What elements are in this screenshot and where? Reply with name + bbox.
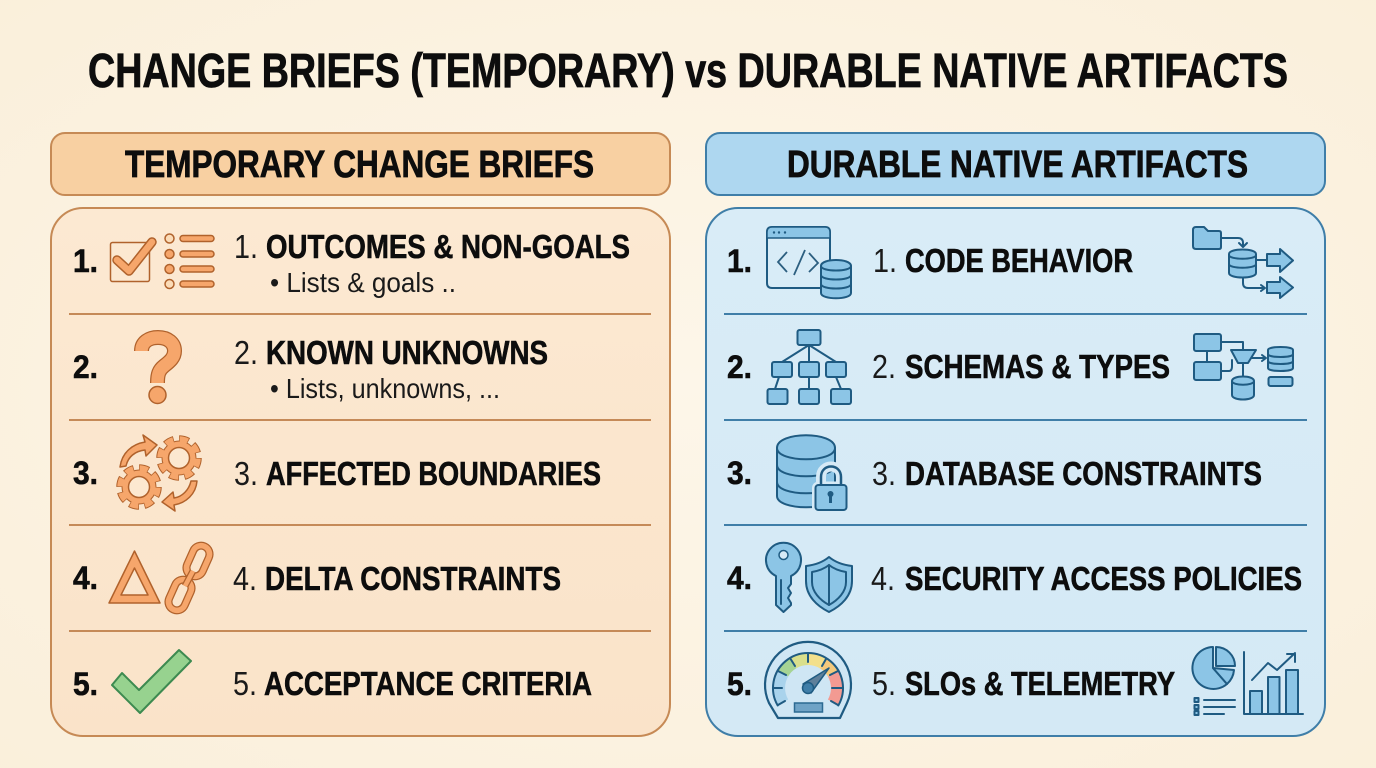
row 1: code behavior: 1. [873, 242, 897, 279]
row 5: acceptance criteria [73, 650, 592, 713]
icon: hierarchy tree [768, 330, 851, 404]
icon: green check mark [112, 650, 191, 713]
row 1: code behavior [727, 227, 1293, 298]
row 2: schemas and types: SCHEMAS & TYPES [905, 348, 1170, 385]
icon: delta triangle and chain [109, 543, 212, 613]
row 3: affected boundaries: 3. [73, 455, 98, 491]
row 1: outcomes and non-goals: OUTCOMES & NON-GOALS [266, 228, 630, 265]
row 2: known unknowns [73, 334, 548, 404]
icon: database with lock [777, 435, 846, 510]
row 2: schemas and types: 2. [872, 348, 896, 385]
row 2: known unknowns: • Lists, unknowns, ... [270, 373, 500, 404]
icon: question mark [142, 338, 174, 404]
panel: temporary change briefs [51, 208, 670, 736]
icon: key and shield [766, 543, 852, 612]
row 5: SLOs and telemetry: 5. [727, 666, 752, 702]
row 4: security access policies: 4. [871, 560, 895, 597]
panel: durable native artifacts [706, 208, 1325, 736]
icon: speedometer gauge [765, 642, 851, 718]
row 2: known unknowns: KNOWN UNKNOWNS [266, 334, 548, 371]
row 4: security access policies [727, 543, 1302, 612]
icon: folder to database flow [1193, 227, 1293, 298]
row 3: database constraints [727, 435, 1262, 510]
row 1: outcomes and non-goals: • Lists & goals .. [270, 267, 456, 298]
row 1: outcomes and non-goals: 1. [234, 228, 258, 265]
header: temporary change briefs [51, 133, 670, 195]
row 1: code behavior: 1. [727, 243, 752, 279]
row 4: security access policies: 4. [727, 560, 752, 596]
icon: pie and bar charts [1192, 647, 1303, 715]
row 5: SLOs and telemetry: 5. [872, 665, 896, 702]
icon: code window and database [767, 227, 851, 298]
row 2: known unknowns: 2. [234, 334, 258, 371]
row 1: outcomes and non-goals [73, 228, 630, 298]
row 3: database constraints: 3. [727, 455, 752, 491]
row 5: acceptance criteria: 5. [233, 665, 257, 702]
row 5: acceptance criteria: ACCEPTANCE CRITERIA [264, 665, 592, 702]
icon: schema flow [1194, 334, 1293, 400]
header: durable native artifacts: DURABLE NATIVE ARTIFACTS [787, 144, 1248, 186]
row 3: database constraints: DATABASE CONSTRAINTS [905, 455, 1262, 492]
row 5: SLOs and telemetry [727, 642, 1303, 718]
row 2: schemas and types: 2. [727, 349, 752, 385]
row 4: security access policies: SECURITY ACCESS POLICIES [905, 560, 1302, 597]
header: temporary change briefs: TEMPORARY CHANGE BRIEFS [125, 144, 594, 186]
row 4: delta constraints [73, 543, 561, 613]
row 4: delta constraints: 4. [73, 560, 98, 596]
row 5: acceptance criteria: 5. [73, 666, 98, 702]
row 2: known unknowns: 2. [73, 349, 98, 385]
header: durable native artifacts [706, 133, 1325, 195]
row 4: delta constraints: 4. [233, 560, 257, 597]
row 4: delta constraints: DELTA CONSTRAINTS [265, 560, 561, 597]
row 3: affected boundaries: 3. [234, 455, 258, 492]
row 3: database constraints: 3. [872, 455, 896, 492]
icon: gears with arrows [120, 435, 198, 511]
row 3: affected boundaries: AFFECTED BOUNDARIES [266, 455, 601, 492]
icon: checklist [110, 234, 214, 288]
row 5: SLOs and telemetry: SLOs & TELEMETRY [905, 665, 1175, 702]
row 2: schemas and types [727, 330, 1293, 404]
row 1: outcomes and non-goals: 1. [73, 243, 98, 279]
row 1: code behavior: CODE BEHAVIOR [905, 242, 1133, 279]
row 3: affected boundaries [73, 435, 601, 511]
